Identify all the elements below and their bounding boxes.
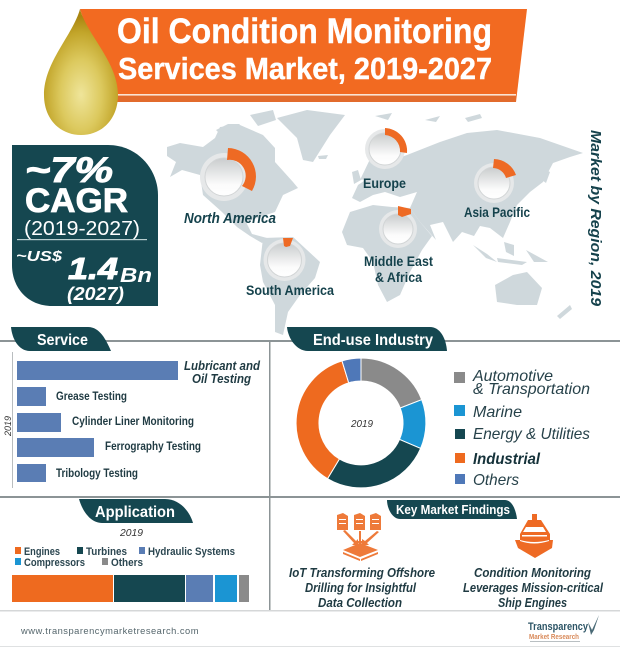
finding text: IoT: Data Collection [318, 595, 402, 610]
region donut: North America [200, 148, 256, 201]
region label: North America: North America [184, 210, 276, 227]
icon: data documents [337, 513, 381, 561]
legend: End-use Industry: Energy & Utilities [473, 426, 590, 443]
stacked bar: Application [12, 575, 249, 602]
bar chart: Service: Ferrography Testing [105, 439, 201, 453]
region label: Middle East and Africa: Middle East [364, 253, 433, 269]
region label: Europe: Europe [363, 175, 406, 191]
legend: End-use Industry [454, 368, 590, 489]
heading: Service [11, 327, 111, 351]
year label: Application: 2019 [119, 528, 143, 539]
bar chart: Service: Grease Testing [56, 389, 127, 403]
legend: End-use Industry: Others [473, 472, 519, 489]
region label: Asia Pacific: Asia Pacific [464, 204, 530, 220]
world map [167, 110, 583, 335]
bar chart: Service: Lubricant and [184, 358, 261, 373]
finding text: IoT [289, 565, 435, 610]
bar chart: Service [3, 352, 261, 488]
CAGR panel: Bn [120, 265, 152, 287]
region label: Middle East and Africa: & Africa [375, 269, 422, 285]
region label: Middle East and Africa [364, 253, 433, 285]
region donut: South America [264, 238, 306, 281]
bar chart: Service: Oil Testing [192, 371, 251, 386]
legend: End-use Industry: Marine [473, 404, 522, 421]
heading: Service: Service [37, 332, 88, 349]
legend: Application: Turbines [86, 546, 127, 558]
legend: Application [15, 546, 235, 569]
title text [117, 12, 492, 86]
title text: Oil Condition Monitoring [117, 12, 492, 51]
heading: End-use Industry [287, 327, 447, 351]
CAGR panel [12, 145, 158, 306]
region donut: Asia Pacific [474, 159, 516, 203]
finding text: IoT: Drilling for Insightful [305, 580, 416, 595]
finding text: Condition Monitoring: Ship Engines [498, 595, 567, 610]
legend: Application: Compressors [24, 557, 85, 569]
legend: End-use Industry: Automotive [472, 368, 553, 385]
logo: Transparency Market Research: Market Research [529, 632, 579, 641]
CAGR panel: ~US$ [16, 248, 63, 265]
heading: Key Market Findings [387, 500, 517, 519]
vertical heading: Market by Region: Market by Region, 2019 [587, 130, 604, 307]
legend: End-use Industry: & Transportation [473, 381, 590, 398]
legend: Application: Hydraulic Systems [148, 546, 235, 558]
region donut: Europe [365, 128, 407, 169]
title banner [80, 9, 527, 102]
icon: ship [515, 514, 553, 558]
axis label: 2019 [3, 416, 13, 437]
heading: Key Market Findings: Key Market Findings [396, 503, 510, 517]
icon: oil drop [44, 9, 118, 135]
title text: Services Market, 2019-2027 [118, 51, 492, 86]
donut centre year: 2019 [350, 419, 373, 430]
heading: End-use Industry: End-use Industry [313, 332, 433, 349]
finding text: Condition Monitoring [463, 565, 603, 610]
finding text: Condition Monitoring: Condition Monitoring [474, 565, 591, 580]
CAGR panel: ~7% [25, 151, 113, 190]
legend: Application: Engines [24, 546, 60, 558]
logo: Transparency Market Research: Transparency [528, 621, 589, 633]
donut chart: End-use Industry [296, 358, 426, 488]
region donut: Middle East and Africa [379, 206, 417, 248]
heading: Application [79, 499, 193, 523]
bar chart: Service: Tribology Testing [56, 466, 138, 480]
legend: Application: Others [111, 557, 143, 569]
finding text: IoT: IoT Transforming Offshore [289, 565, 435, 580]
website url: www.transparencymarketresearch.com [20, 626, 199, 637]
heading: Application: Application [95, 504, 175, 521]
CAGR panel: (2027) [67, 284, 124, 304]
logo: Transparency Market Research [528, 615, 599, 642]
legend: End-use Industry: Industrial [473, 451, 541, 468]
CAGR panel: (2019-2027) [24, 218, 140, 240]
region label: South America: South America [246, 282, 334, 298]
bar chart: Service: Cylinder Liner Monitoring [72, 414, 194, 428]
CAGR panel: CAGR [25, 182, 128, 220]
CAGR panel: 1.4 [68, 251, 118, 286]
